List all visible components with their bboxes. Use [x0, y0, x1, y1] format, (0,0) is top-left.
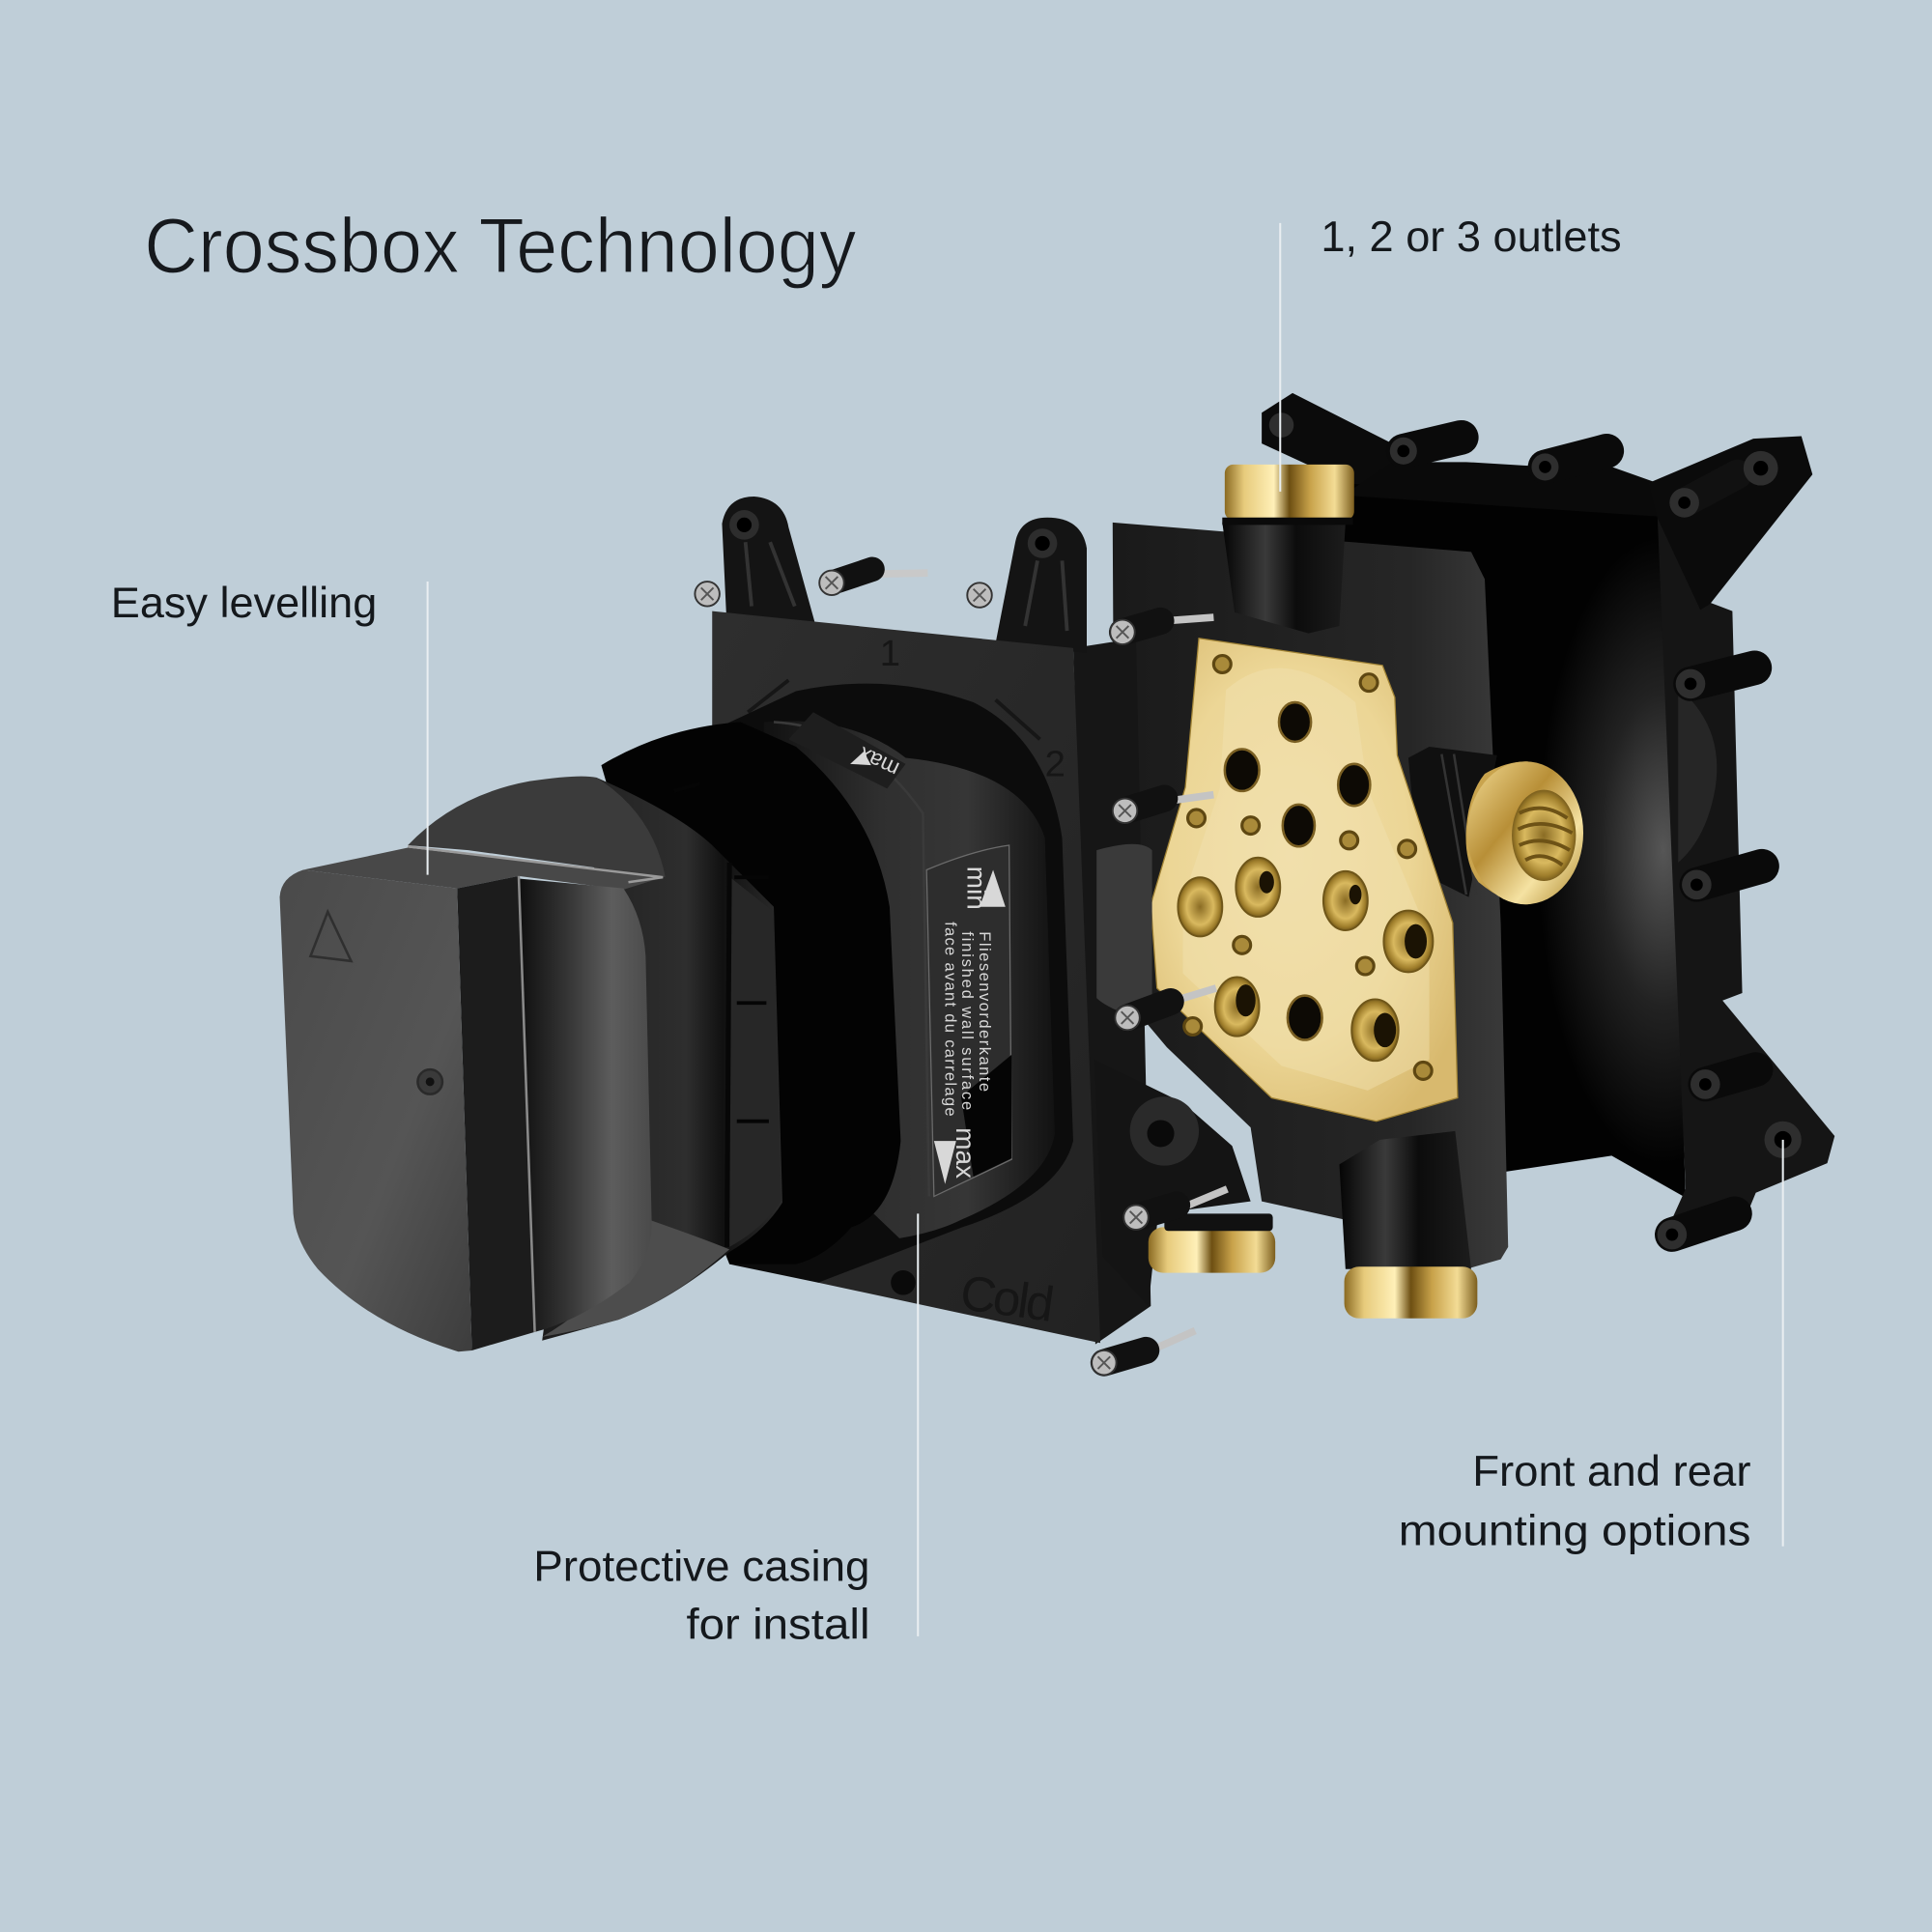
mounting screws	[695, 569, 1227, 1375]
outlet: right threaded	[1408, 747, 1583, 904]
protective casing	[601, 684, 1073, 1283]
manifold backing plate	[1113, 523, 1508, 1269]
outlet: bottom right	[1339, 1131, 1477, 1319]
knob top cap	[408, 777, 666, 877]
front mounting plate: 2	[1045, 744, 1065, 785]
ports: plain holes	[1225, 702, 1370, 1040]
outlet: top	[1222, 465, 1354, 634]
front mounting plate: 1	[880, 633, 900, 674]
callout: protective casing: Protective casing	[533, 1543, 870, 1590]
mounting clip: right	[996, 518, 1087, 653]
brass valve body	[1151, 639, 1458, 1122]
callout: protective casing: for install	[686, 1601, 870, 1648]
product illustration: Crossbox unit	[280, 393, 1834, 1375]
callout: easy levelling: Easy levelling	[111, 580, 377, 627]
ports: threaded holes	[1178, 858, 1433, 1061]
casing printed markings: max	[951, 1127, 980, 1179]
rear box mounting tubes	[1404, 438, 1762, 1235]
casing printed markings: min	[961, 867, 991, 910]
knob barrel	[542, 778, 782, 1341]
knob front face	[280, 870, 472, 1351]
casing printed markings: finished wall surface	[958, 931, 977, 1110]
casing printed markings: face avant du carrelage	[941, 922, 959, 1117]
casing printed markings: Fliesenvorderkante	[976, 931, 994, 1092]
front mounting plate: Cold	[957, 1264, 1058, 1332]
callout: mounting options: mounting options	[1399, 1507, 1750, 1554]
callout: mounting options	[1399, 1140, 1783, 1554]
ports: small holes	[1184, 656, 1432, 1079]
front plate side frame	[1073, 639, 1251, 1345]
title: Crossbox Technology	[144, 203, 857, 290]
knob right face	[519, 878, 652, 1332]
callout: 1, 2 or 3 outlets: 1, 2 or 3 outlets	[1321, 213, 1622, 261]
casing printed markings	[850, 742, 1006, 1184]
callout: protective casing	[533, 1213, 918, 1648]
mounting clip: left	[722, 497, 818, 635]
outlet: bottom left	[1149, 1213, 1275, 1273]
knob ridge	[457, 876, 535, 1350]
knob top face	[303, 846, 663, 890]
front mounting plate	[712, 611, 1100, 1343]
casing printed markings: max	[854, 742, 903, 782]
callout: mounting options: Front and rear	[1472, 1448, 1751, 1495]
dark centres of threaded holes	[1236, 871, 1427, 1047]
rear mounting box	[1262, 393, 1834, 1249]
